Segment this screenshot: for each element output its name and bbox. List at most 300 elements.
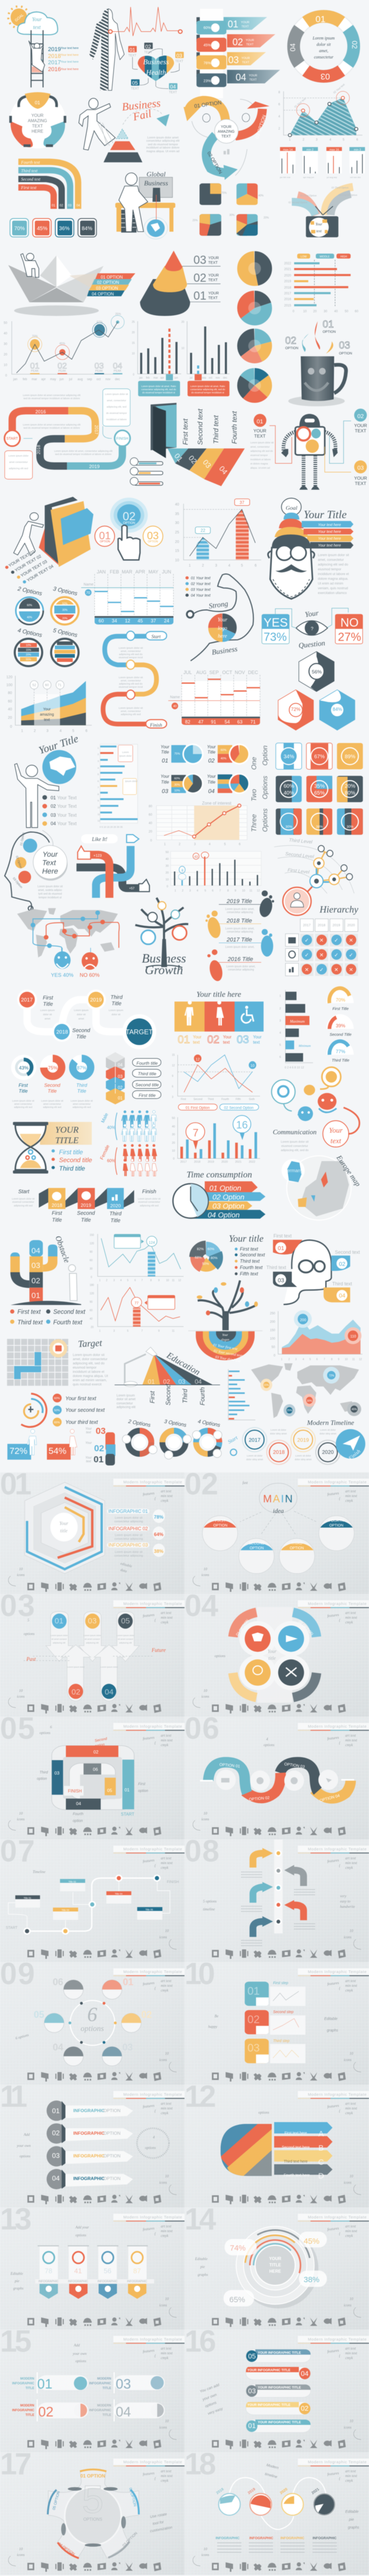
chart: line with striped peaks: 6 (255, 564, 257, 568)
chart: gantt monthly red: DEC (248, 670, 258, 675)
panel 11: banners with discs: 04 (52, 2174, 60, 2182)
chart: peaks line chart: 50 (4, 322, 7, 325)
chart: blue and red area with bubbles: 200 (300, 1319, 306, 1322)
widget: yes no eye question: 73% (264, 630, 287, 643)
widget: amazing text three-lobe circle: 01 (35, 100, 40, 105)
chart: gantt monthly blue: APR (135, 569, 145, 574)
chart: four small max min bar charts: max 16 (329, 148, 339, 152)
widget: paper boat with options (8, 253, 135, 316)
widget: education lamp triangle: 03 (178, 1378, 186, 1385)
widget: snake timeline: adipiscing elit sed (121, 713, 141, 716)
chart: blue and red area with bubbles: 5 (309, 1358, 311, 1361)
panel 14: concentric circle: HERE (269, 2269, 281, 2274)
widget: education lamp triangle: 02 (163, 1378, 170, 1385)
panel 17: five options hub: min text (161, 2474, 173, 2478)
chart: time consumption bars: 40 (172, 1125, 175, 1128)
widget: strong business arm with logo pie: Your (218, 617, 227, 623)
widget: year circles timeline: Finish (347, 1449, 362, 1462)
widget: ribbon timeline start finish (12, 1188, 161, 1224)
chart: exploded pie with title: 82% (197, 1247, 204, 1251)
chart: line with striped peaks: 37 (240, 500, 245, 505)
widget: amazing text three-lobe circle (9, 92, 65, 148)
widget: four percentage tiles: 36% (59, 226, 70, 232)
chart: two option line chart: 12 (196, 1058, 200, 1062)
widget: europe map globe: Germany (283, 1168, 303, 1173)
panel 18: four pies timeline: 2018 (216, 2488, 225, 2495)
widget: head with four numbered tabs: Second text (335, 1250, 360, 1255)
widget: amazing text three-lobe circle: YOUR (31, 113, 44, 118)
widget: road timeline start to finish: adipiscing elit sed (9, 467, 28, 470)
widget: stacked cubes with pills: 04 (118, 1063, 123, 1067)
chart: peaks line chart: 62% (96, 321, 103, 324)
panel 07: timeline cards: Title 01 (24, 1897, 32, 1899)
panel 15: four numbered cards: Add (73, 2343, 80, 2347)
panel 11: banners with discs: OPTION (103, 2108, 121, 2113)
panel 15: four numbered cards: INFOGRAPHIC (89, 2382, 112, 2385)
panel 03: five arrows: adipiscing elit (119, 1641, 132, 1644)
widget: mug with steam: 02 (285, 335, 296, 346)
widget: check and cross table: ✓ (305, 938, 309, 944)
panel 02: main idea: SECOND (249, 1542, 265, 1545)
chart: gantt monthly red: AUG (196, 670, 207, 675)
widget: robot with gears: TEXT (254, 433, 266, 439)
panel 06: wave path: min text (345, 1738, 357, 1742)
widget: options tile grid: 20% (345, 784, 355, 789)
panel 06: wave path: art text (345, 1733, 356, 1738)
widget: target timeline: Title (43, 1002, 53, 1007)
panel 11: banners with discs: your own (16, 2144, 31, 2148)
panel 17: five options hub: 17 (0, 2447, 32, 2481)
widget: footprints timeline: consectetur adipiscing (227, 930, 253, 934)
widget: hipster head with stacked layers: Your text here (318, 530, 341, 534)
chart: striped area line chart: 1 (289, 138, 291, 142)
panel 18: four pies timeline: art text (345, 2469, 356, 2473)
chart: twin monthly bar charts: dec (223, 377, 228, 380)
panel 12: striped half disc with letter banners: cmyk (345, 2111, 353, 2115)
widget: cylinder stack numbers: Your (85, 1428, 92, 1431)
widget: four option stacked discs: 10% (26, 644, 32, 647)
charts: two line charts with bubbles: 7 (141, 1279, 143, 1282)
widget: paper boat with options: 02 OPTION (97, 280, 119, 285)
widget: options tile grid: 65% (314, 790, 325, 796)
widget: four option stacked discs: 2 Options (16, 586, 43, 597)
panel 09: six options circle: icons (159, 2058, 167, 2062)
widget: head with music bubbles: Text (42, 858, 56, 867)
widget: year circles timeline: Start (227, 1435, 239, 1445)
panel 10: three step cards: cmyk (345, 1988, 353, 1993)
widget: education lamp triangle: dolor sit amet (116, 1398, 135, 1401)
widget: world map with pins (251, 1363, 361, 1426)
chart: four small max min bar charts: oct nov dec (350, 176, 361, 179)
widget: body and business health heart: Business (143, 58, 169, 66)
chart: two option line chart: Sixth (249, 1098, 255, 1101)
widget: target timeline: 2019 (90, 997, 102, 1003)
widget: snake timeline: Start (151, 634, 161, 639)
widget: options tile grid: 40% (284, 790, 294, 796)
panel 18: four pies timeline: pie (348, 2518, 354, 2522)
widget: road timeline start to finish: Lorem ipsum dolor sit (105, 393, 129, 395)
widget: cylinder stack numbers: text (86, 1460, 91, 1463)
widget: ribbon timeline start finish: 2019 (81, 1203, 91, 1208)
chart: horizontal year bars: 0 (293, 310, 295, 313)
chart: peaks line chart: PEAK (59, 370, 66, 373)
chart: line with striped peaks: 40 (175, 503, 179, 507)
panel 15: four numbered cards: TITLE (102, 2414, 111, 2417)
panel 16: five pills: YOUR INFOGRAPHIC TITLE (247, 2403, 290, 2407)
chart: gantt monthly blue: JAN (96, 569, 106, 574)
chart: peaks line chart: PEAK (31, 370, 39, 373)
widget: stacked cone: 01 (193, 289, 206, 302)
widget: strong business arm with logo pie: logo (218, 626, 227, 631)
panel 15: four numbered cards: options (75, 2359, 86, 2363)
panel 15: four numbered cards: MODERN (97, 2404, 111, 2407)
panel 01: hexagon rings: min text (161, 1494, 173, 1498)
chart: twelve horizontal bars with callouts: Lorem (122, 751, 129, 754)
panel 17: five options hub (0, 2447, 184, 2575)
panel 02: main idea: min text (345, 1494, 357, 1498)
widget: options tile grid: One (250, 757, 258, 770)
panel 15: four numbered cards: MODERN (20, 2377, 34, 2381)
charts: two line charts with bubbles: 90 (90, 1251, 93, 1254)
widget: check and cross table: 2020 (347, 924, 355, 927)
charts: four title pies: Title (161, 750, 169, 755)
widget: TV with four option tubes: 04 Fourth Option (338, 194, 357, 197)
widget: check and cross table: 2019 (333, 924, 341, 927)
widget: ring with four numbered segments: 01 (316, 14, 325, 24)
panel 12: striped half disc with letter banners: 12 (184, 2079, 216, 2114)
widget: ribbon percentages with banners: YOUR (241, 21, 249, 24)
panel 04: four option flower: min text (345, 1616, 357, 1620)
widget: rainbow arcs with text: Fourth text (21, 160, 41, 165)
panel 18: four pies timeline: timeline (264, 2472, 278, 2479)
widget: snake timeline: adipiscing elit sed do (119, 653, 143, 656)
chart: horizontal year bars: 2021 (284, 268, 292, 271)
widget: target timeline: Lorem ipsum (109, 1009, 123, 1012)
chart: twin monthly bar charts: consectetur adipiscing elit, sed do (190, 388, 226, 391)
panel 18: four pies timeline (184, 2447, 369, 2575)
widget: ribbon percentages with banners: 60% (203, 26, 211, 30)
chart: maximum minimum bars: Minimum (298, 1045, 311, 1048)
widget: target grid: Target (77, 1337, 103, 1349)
widget: communication bubbles: Communication (273, 1128, 317, 1136)
panel 02: main idea: cmyk (345, 1499, 353, 1503)
charts: four pie circles (246, 260, 264, 394)
widget: footprints timeline: consectetur adipiscing (227, 911, 253, 914)
chart: twelve horizontal bars with callouts: 9 (98, 799, 99, 802)
widget: gender pictogram bars: 01 (178, 1034, 190, 1046)
widget: gender pictogram bars: Your title here (197, 990, 241, 999)
panel 11: banners with discs: icons (159, 2181, 167, 2185)
panel 11: banners with discs: features (142, 2104, 155, 2109)
panel 02: main idea: MAIN (263, 1493, 294, 1505)
chart: zone of interest: Zone of interest (202, 801, 232, 806)
widget: three donuts: adipiscing elit sed (14, 1106, 33, 1108)
widget: road timeline start to finish: sed do eiusmod tempor incididunt ut labore et dolore (55, 453, 112, 455)
chart: exploded pie with title: Third text (240, 1259, 260, 1264)
widget: target timeline: dolor sit (77, 1013, 86, 1016)
charts: four title pies: 60% (220, 749, 227, 752)
widget: TV with four option tubes: text (316, 229, 322, 233)
panel 12: striped half disc with letter banners: options (258, 2111, 269, 2115)
panel 13: hanging flags: 78 (45, 2267, 52, 2275)
widget: plane target rings: 50% (54, 1409, 60, 1412)
panel 07: timeline cards: Title 03 (62, 1909, 70, 1911)
chart: peaks line chart: PEAK (114, 370, 122, 373)
panel 06: wave path: OPTION 02 (249, 1795, 270, 1802)
chart: zone of interest: 20 (149, 830, 152, 834)
panel 05: nested square path: Modern Infographic Template (123, 1724, 182, 1729)
chart: maximum minimum bars: 2 (279, 1007, 281, 1010)
panel 16: five pills: You can add (199, 2383, 220, 2394)
chart: twelve bars with 43 highlight: 9 (235, 889, 236, 893)
charts: four title pies: 03 (162, 788, 169, 795)
panel 01: hexagon rings: editable (120, 1561, 132, 1569)
panel 02: main idea: OPTION (290, 1547, 304, 1550)
widget: three donuts: Title (77, 1088, 86, 1094)
widget: footprints timeline (206, 890, 274, 982)
chart: maximum minimum bars: 6 (279, 1056, 281, 1059)
chart: peaks line chart: 01 (30, 362, 40, 371)
widget: check and cross table (285, 919, 358, 976)
panel 09: six options circle: 6 options (15, 2033, 30, 2040)
chart: blue and red area with bubbles: 2 (288, 1358, 290, 1361)
panel 10: three step cards: art text (345, 1979, 356, 1983)
chart: stacked area: 3 (46, 729, 48, 733)
chart: gantt monthly blue: Name (84, 583, 93, 587)
panel 07: timeline cards: Title 04 (115, 1893, 123, 1895)
charts: two line charts with bubbles: 5 (127, 1330, 129, 1333)
charts: two line charts with bubbles: 10 (166, 1279, 169, 1282)
chart: peaks line chart: may (50, 378, 56, 381)
panel 02: main idea: 02 (184, 1467, 218, 1501)
chart: striped area line chart: 8 (278, 91, 280, 94)
panel 03: five arrows: 02 (72, 1688, 80, 1697)
widget: paper boat with options: 04 OPTION (92, 292, 114, 296)
panel 13: hanging flags: options (75, 2233, 86, 2237)
panel 06: wave path: OPTION 03 (284, 1761, 305, 1769)
widget: mug with steam (285, 319, 352, 407)
panel 14: concentric circle: Editable (195, 2257, 208, 2261)
chart: time consumption bars: 2017 (180, 1161, 187, 1164)
panel 06: wave path: cmyk (345, 1743, 353, 1747)
widget: year circles timeline: 2019 (297, 1438, 309, 1443)
widget: cylinder stack numbers: 01 (94, 1454, 103, 1464)
widget: gender pictogram bars: Your (223, 1035, 232, 1039)
widget: four option stacked discs: 4 Options (17, 627, 43, 639)
panel 01: hexagon rings: INFOGRAPHIC 02 (108, 1526, 148, 1531)
chart: peaks line chart: dec (115, 378, 120, 381)
chart: stacked area: 20 (8, 716, 12, 720)
widget: door with four stripes: First text (181, 418, 189, 445)
charts: four title pies: Your (207, 745, 216, 749)
widget: plane target rings: Your second text (65, 1408, 105, 1413)
widget: four option stacked discs: 50% (62, 602, 68, 606)
widget: hipster head with stacked layers: dolore magna aliqua. (318, 577, 348, 581)
widget: stacked cubes with pills: 01 (118, 1096, 123, 1101)
widget: ribbon percentages with banners: 04 (236, 72, 246, 83)
widget: male female pictograms: 40% (107, 1125, 115, 1130)
panel 15: four numbered cards: art text (161, 2346, 172, 2351)
chart: zone of interest: 60 (149, 814, 152, 817)
chart: twin monthly bar charts: jan (139, 377, 143, 380)
widget: plane target rings: 65% (54, 1421, 60, 1424)
chart: two option line chart: Fifth (236, 1098, 241, 1101)
panel 05: nested square path: 01 (124, 1787, 130, 1792)
panel 18: four pies timeline: features (327, 2471, 339, 2476)
panel 05: nested square path: 10 (19, 1811, 23, 1816)
widget: options tile grid: Options (261, 808, 269, 832)
panel 11: banners with discs: OPTION (103, 2153, 121, 2158)
panel 05: nested square path: START (121, 1812, 134, 1817)
widget: stacked cone (140, 251, 220, 316)
widget: target timeline: First (43, 995, 54, 1001)
widget: body and business health heart: 01 (129, 47, 135, 53)
chart: blue and red area with bubbles: 7 (324, 1358, 325, 1361)
panel 17: five options hub: features (142, 2471, 155, 2476)
widget: man holding globe: 02 Your Text (51, 804, 77, 809)
panel 10: three step cards: Modern Infographic Template (308, 1969, 367, 1974)
charts: two line charts with bubbles: 8 (150, 1279, 152, 1282)
widget: stacked cubes with pills: 02 (118, 1085, 123, 1090)
chart: gantt monthly red: SEP (209, 670, 219, 675)
widget: cactus obstacle: Obstacle (53, 1235, 71, 1264)
panel 16: five pills: very easy (207, 2407, 224, 2416)
chart: zone of interest: 2 (179, 843, 181, 846)
widget: man holding globe: 01 Your Text (51, 795, 77, 800)
panel 01: hexagon rings: Your (60, 1521, 69, 1526)
widget: business growth tree (135, 898, 188, 977)
widget: stacked cubes with pills: First title (139, 1093, 156, 1098)
chart: line with striped peaks: 20 (175, 540, 179, 544)
panel 01: hexagon rings: data (120, 1568, 128, 1573)
widget: target grid: incididunt ut labore et (73, 1370, 104, 1374)
panel 14: concentric circle: min text (345, 2229, 357, 2233)
widget: body and business health heart: 02 (145, 44, 151, 50)
panel 03: five arrows: cmyk (161, 1620, 169, 1624)
charts: two line charts with bubbles: 5 (127, 1279, 129, 1282)
widget: door with four stripes: aliqua. Ut enim ad (250, 467, 270, 469)
panel 05: nested square path: First (138, 1782, 146, 1786)
panel 11: banners with discs: 4 (153, 2135, 155, 2139)
widget: business growth tree: Business (142, 952, 186, 966)
widget: climbing ladder to cloud with years: 2016 (48, 66, 61, 73)
chart: two option line chart: 3 (172, 1096, 173, 1099)
widget: target timeline: Second (72, 1028, 90, 1034)
chart: blue and red area with bubbles: 6 (316, 1358, 318, 1361)
widget: climbing ladder to cloud with years: Your (32, 17, 42, 23)
widget: world map with pins: Modern Timeline (306, 1419, 354, 1426)
panel 10: three step cards: 01 (247, 1985, 260, 1997)
panel 02: main idea: 10 (203, 1567, 208, 1571)
panel 06: wave path: icons (201, 1817, 209, 1821)
widget: option donuts: 2 Options (127, 1419, 151, 1429)
panel 11: banners with discs: cmyk (161, 2111, 169, 2115)
chart: horizontal year bars: 2017 (284, 292, 292, 295)
chart: blue and red area with bubbles (270, 1310, 362, 1361)
widget: stacked cone: TEXT (208, 296, 218, 300)
chart: two option line chart: 6 (172, 1085, 173, 1088)
widget: year circles timeline: Lorem sit dolor (247, 1454, 263, 1457)
widget: ribbon percentages with banners: 02 (232, 37, 243, 47)
widget: yes no eye question: NO (341, 616, 358, 629)
panel 09: six options circle (0, 1957, 184, 2085)
panel 06: wave path: { (339, 1741, 341, 1745)
widget: head with four numbered tabs (266, 1233, 360, 1304)
widget: robot with gears: YOUR (354, 423, 367, 428)
chart: stacked area: 6 (85, 729, 88, 733)
panel 17: five options hub: cmyk (161, 2479, 169, 2483)
panel 08: arrows band: 5 options (203, 1899, 217, 1904)
chart: blue and red area with bubbles: 110 (350, 1335, 356, 1339)
panel 14: concentric circle: 10 (349, 2297, 353, 2301)
widget: road timeline start to finish (4, 389, 130, 479)
widget: head with four numbered tabs: Third text (332, 1281, 352, 1286)
panel 16: five pills: 16 (184, 2324, 216, 2359)
chart: twin monthly bar charts: consectetur adipiscing elit, sed do (141, 388, 177, 391)
widget: tree with roots arcs (188, 1281, 263, 1363)
chart: peaks line chart: 10 (4, 364, 7, 367)
widget: target timeline: 2018 (56, 1029, 69, 1035)
widget: education lamp triangle (114, 1347, 220, 1409)
widget: head with music bubbles: Here (42, 867, 58, 875)
widget: stacked cubes with pills: 03 (118, 1074, 123, 1079)
charts: four title pies: Your (161, 745, 170, 749)
widget: target timeline: amet (45, 1017, 51, 1021)
chart: gantt monthly blue: 70 (86, 591, 90, 595)
panel 16: five pills: icons (344, 2425, 352, 2430)
panel 13: hanging flags: 13 (0, 2202, 32, 2236)
chart: peaks line chart: 02 (57, 362, 67, 371)
widget: hipster head with stacked layers: Your text here (318, 523, 341, 527)
widget: amazing text three-lobe circle: TEXT (32, 124, 43, 128)
widget: ribbon percentages with banners: YOUR (246, 39, 254, 42)
panel 03: five arrows: Lorem ipsum dolor (67, 1666, 85, 1668)
widget: communication bubbles: text (331, 1137, 342, 1145)
chart: striped area line chart: 3 (316, 138, 318, 142)
widget: three donuts: Second (44, 1083, 61, 1088)
widget: ribbon percentages with banners: 76% (203, 62, 211, 65)
widget: ribbon percentages with banners: YOUR (241, 57, 250, 60)
widget: three donuts: 43% (19, 1065, 28, 1071)
widget: amazing text three-lobe circle: HERE (32, 129, 43, 134)
panel 11: banners with discs (0, 2079, 184, 2207)
widget: check and cross table: ✕ (319, 953, 324, 958)
widget: road timeline start to finish: Lorem ipsum dolor sit amet, consectetur adipiscing elit (54, 450, 113, 452)
widget: hipster head with stacked layers: adipiscing elit sed do (318, 563, 348, 567)
widget: cylinder stack numbers: 02 (94, 1443, 104, 1453)
chart: twin monthly bar charts: do eiusmod tempor incididunt ut (191, 391, 225, 394)
chart: gantt monthly red: OCT (222, 670, 232, 675)
panel 18: four pies timeline: 10 (203, 2547, 208, 2551)
chart: twin monthly bar charts: apr (160, 377, 164, 380)
panel 11: banners with discs: art text (161, 2102, 172, 2106)
panel 03: five arrows: 04 (105, 1688, 113, 1697)
panel 05: nested square path: features (142, 1736, 155, 1741)
panel 18: four pies timeline: Modern (266, 2463, 279, 2470)
widget: three gauges: 77% (336, 1049, 345, 1054)
widget: year circles timeline: Lorem sit dolor (295, 1454, 311, 1457)
panel 17: five options hub: 02 OPTION (128, 2488, 137, 2507)
widget: hand selecting option 02: OPTION (148, 540, 158, 543)
panel 18: four pies timeline: INFOGRAPHIC (216, 2537, 240, 2540)
chart: exploded pie with title: Second text (240, 1252, 265, 1257)
widget: option donuts: 3 Options (163, 1419, 187, 1429)
panel 14: concentric circle: features (327, 2226, 339, 2232)
panel 05: nested square path: Second (94, 1737, 108, 1743)
chart: horizontal year bars: 2016 (284, 298, 292, 301)
chart: twelve horizontal bars with callouts: 4 (98, 767, 99, 769)
panel 16: five pills: options (205, 2401, 217, 2409)
